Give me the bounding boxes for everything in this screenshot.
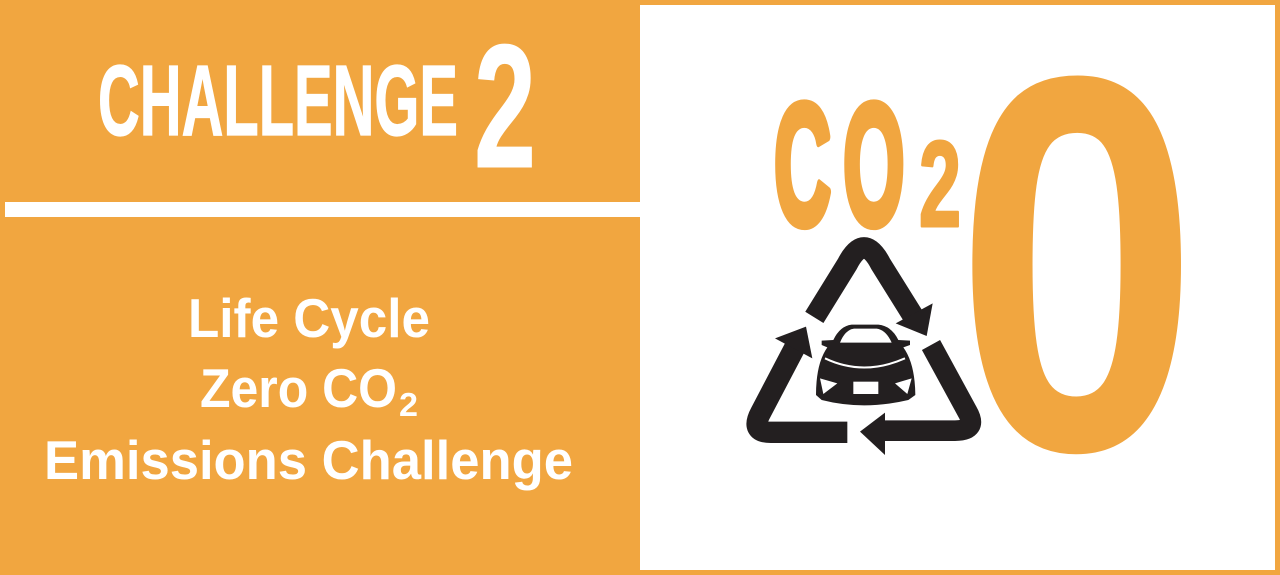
text block: life cycle zero CO2 emissions challenge: Emissions Challenge <box>44 429 573 491</box>
heading: challenge 2: CHALLENGE <box>98 45 458 157</box>
arrow: bottom right <box>860 345 971 455</box>
divider bar <box>5 202 640 217</box>
heading: challenge 2: 2 <box>474 9 536 205</box>
logo text: CO2: 2 <box>919 115 961 252</box>
text block: life cycle zero CO2 emissions challenge: Life Cycle <box>188 287 430 349</box>
heading: challenge 2 <box>98 9 536 205</box>
icon: recycling arrows around a car <box>757 248 971 455</box>
text block: life cycle zero CO2 emissions challenge: 2 <box>399 386 418 423</box>
arrow: left <box>757 327 847 432</box>
text block: life cycle zero CO2 emissions challenge <box>44 287 573 491</box>
text block: life cycle zero CO2 emissions challenge: Zero CO <box>200 357 397 419</box>
arrow: top <box>814 248 933 336</box>
panel: white logo panel <box>640 5 1275 570</box>
icon: car front view <box>816 325 915 405</box>
logo text: CO2: CO <box>774 70 917 261</box>
